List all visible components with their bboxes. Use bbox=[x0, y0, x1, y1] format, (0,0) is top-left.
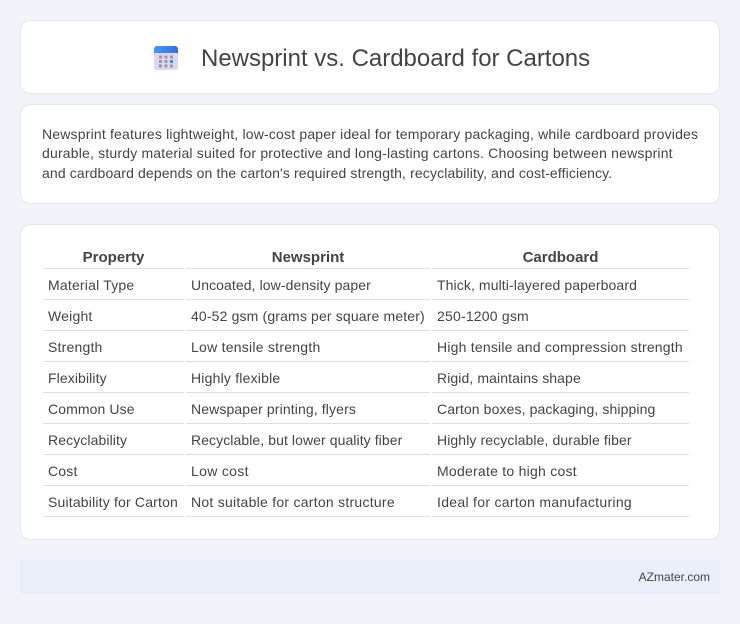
row: Weight bbox=[43, 308, 689, 331]
intro text: durable, sturdy material suited for protective and long-lasting cartons. Choosing between newsprint bbox=[42, 145, 673, 161]
row: Material Type: Thick, multi-layered paperboard bbox=[437, 277, 637, 293]
row: Cost bbox=[43, 463, 689, 486]
row: Common Use: Carton boxes, packaging, shipping bbox=[437, 401, 655, 417]
row: Common Use bbox=[43, 401, 689, 424]
row: Suitability for Carton bbox=[43, 494, 689, 517]
row: Flexibility: Flexibility bbox=[48, 370, 107, 386]
row: Common Use: Common Use bbox=[48, 401, 135, 417]
row: Cost: Cost bbox=[48, 463, 78, 479]
row: Recyclability: Recyclable, but lower quality fiber bbox=[191, 432, 402, 448]
row: Suitability for Carton: Ideal for carton manufacturing bbox=[437, 494, 632, 510]
icon: calendar bbox=[154, 46, 178, 70]
row: Cost: Moderate to high cost bbox=[437, 463, 577, 479]
footer bar bbox=[20, 560, 720, 594]
intro text: and cardboard depends on the carton's required strength, recyclability, and cost-efficiency. bbox=[42, 165, 612, 181]
title: Newsprint vs. Cardboard for Cartons bbox=[201, 45, 590, 72]
row: Recyclability bbox=[43, 432, 689, 455]
row: Strength: Strength bbox=[48, 339, 103, 355]
row: Weight: 250-1200 gsm bbox=[437, 308, 529, 324]
row: Strength: Low tensile strength bbox=[191, 339, 321, 355]
row: Strength bbox=[43, 339, 689, 362]
row: Flexibility: Highly flexible bbox=[191, 370, 280, 386]
footer text: AZmater.com bbox=[639, 570, 710, 584]
intro text: Newsprint features lightweight, low-cost paper ideal for temporary packaging, while cardboard provides bbox=[42, 126, 698, 142]
title panel bbox=[20, 20, 720, 94]
row: Weight: Weight bbox=[48, 308, 93, 324]
row: Recyclability: Recyclability bbox=[48, 432, 127, 448]
row: Material Type: Uncoated, low-density paper bbox=[191, 277, 371, 293]
row: Weight: 40-52 gsm (grams per square meter) bbox=[191, 308, 425, 324]
row: Material Type bbox=[43, 277, 689, 300]
row: Recyclability: Highly recyclable, durable fiber bbox=[437, 432, 632, 448]
table header: Newsprint bbox=[272, 249, 344, 266]
row: Flexibility: Rigid, maintains shape bbox=[437, 370, 581, 386]
intro text bbox=[42, 126, 698, 181]
row: Cost: Low cost bbox=[191, 463, 249, 479]
row: Flexibility bbox=[43, 370, 689, 393]
table header: Property bbox=[83, 249, 144, 266]
row: Suitability for Carton: Not suitable for carton structure bbox=[191, 494, 395, 510]
row: Material Type: Material Type bbox=[48, 277, 134, 293]
row: Suitability for Carton: Suitability for Carton bbox=[48, 494, 178, 510]
row: Common Use: Newspaper printing, flyers bbox=[191, 401, 356, 417]
row: Strength: High tensile and compression strength bbox=[437, 339, 683, 355]
table header: Cardboard bbox=[523, 249, 598, 266]
intro panel bbox=[20, 104, 720, 204]
table header bbox=[43, 249, 689, 269]
comparison table panel bbox=[20, 224, 720, 540]
